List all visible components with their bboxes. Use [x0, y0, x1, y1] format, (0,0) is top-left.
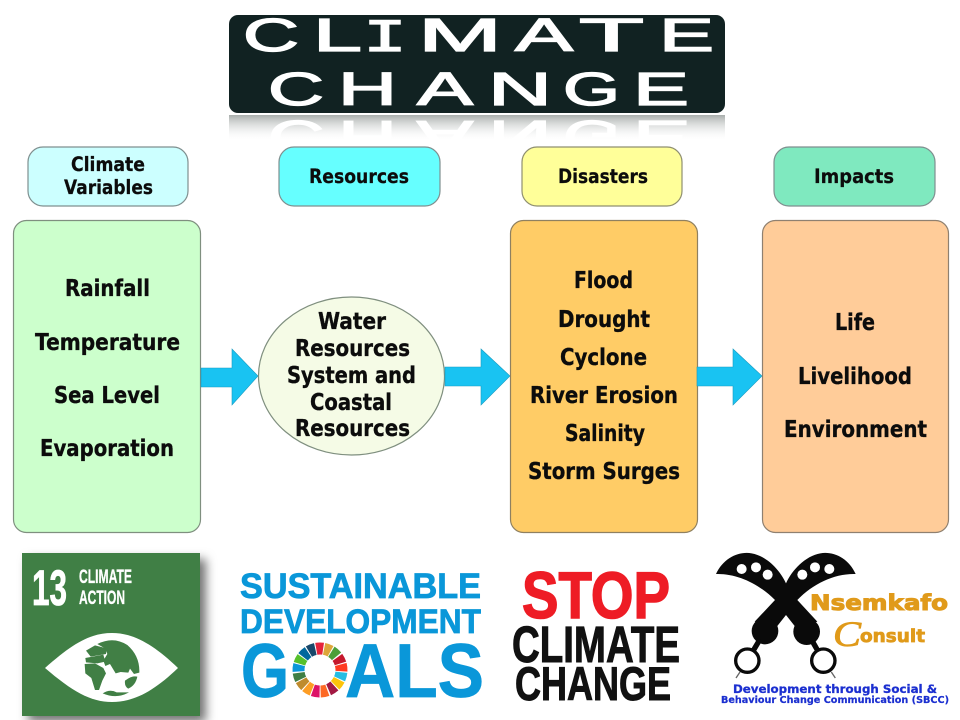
panel: resources ellipse: System and [287, 363, 416, 389]
panel: impacts: Livelihood [798, 364, 912, 390]
title reflection: C [268, 111, 324, 163]
logo: Nsemkafo Consult: onsult [860, 626, 925, 647]
title: CHANGE: G [563, 63, 620, 115]
title: CLIMATE: E [659, 9, 714, 61]
panel: disasters [510, 220, 698, 532]
panel: disasters: Cyclone [560, 345, 647, 371]
header: Impacts: Impacts [814, 165, 894, 188]
panel: disasters: River Erosion [530, 383, 678, 409]
panel: resources ellipse: Resources [295, 416, 410, 442]
panel: resources ellipse: Resources [295, 336, 410, 362]
logo: Stop Climate Change: CHANGE [515, 657, 671, 710]
arrow: resources to disasters [445, 349, 510, 405]
logo: Stop Climate Change: CLIMATE [512, 616, 680, 673]
logo: Nsemkafo Consult: Behaviour Change Communication (SBCC) [721, 695, 949, 706]
logo: Nsemkafo Consult: Nsemkafo [810, 591, 948, 615]
logo: SDG 13 climate action [22, 553, 200, 716]
title: CHANGE: E [633, 63, 689, 115]
title reflection: H [338, 111, 397, 163]
header: Disasters [522, 147, 682, 206]
logo: Sustainable Development Goals: ALS [345, 629, 484, 714]
logo: SDG 13 climate action: ACTION [79, 588, 125, 609]
icon: eye with globe [45, 633, 178, 702]
title reflection: E [633, 111, 689, 163]
title: CHANGE: C [268, 63, 324, 115]
title: CLIMATE: C [243, 9, 299, 61]
panel: climate variables [14, 220, 200, 532]
title: CLIMATE [243, 9, 714, 65]
header: Resources [279, 147, 440, 206]
logo: SDG 13 climate action: 13 [32, 560, 67, 616]
header: Impacts [774, 147, 935, 206]
arrow: disasters to impacts [697, 349, 762, 405]
title reflection: N [488, 111, 552, 163]
logo: Stop Climate Change [512, 558, 680, 710]
title: CHANGE [268, 63, 689, 115]
title banner [229, 9, 725, 115]
title: CLIMATE: M [418, 9, 502, 61]
logo: Nsemkafo Consult: Development through Social & [733, 682, 937, 696]
panel: disasters: Flood [574, 268, 633, 294]
panel: climate variables: Temperature [35, 330, 180, 356]
title: CLIMATE: T [579, 9, 644, 61]
logo: Nsemkafo Consult [716, 553, 949, 706]
panel: disasters: Drought [558, 307, 650, 333]
logo: Sustainable Development Goals [240, 567, 484, 714]
logo: SDG 13 climate action: CLIMATE [79, 567, 132, 588]
panel: disasters: Salinity [565, 421, 645, 447]
header: Resources: Resources [309, 165, 409, 188]
panel: resources ellipse [258, 297, 444, 455]
title: CHANGE: A [417, 63, 474, 115]
header: Disasters: Disasters [558, 165, 648, 188]
title reflection: G [563, 111, 620, 163]
panel: climate variables: Sea Level [54, 383, 160, 409]
logo: Sustainable Development Goals: DEVELOPMENT [240, 603, 481, 641]
icon: SDG colour wheel [290, 640, 350, 700]
panel: climate variables: Evaporation [40, 436, 174, 462]
icon: crossed swords [716, 553, 856, 678]
header: Climate Variables: Climate [71, 153, 145, 176]
logo: Stop Climate Change: STOP [522, 558, 670, 632]
panel: impacts: Life [835, 310, 875, 336]
panel: disasters: Storm Surges [528, 459, 680, 485]
logo: Nsemkafo Consult: C [833, 614, 862, 654]
title: CLIMATE: I [363, 13, 407, 65]
panel: impacts: Environment [784, 417, 927, 443]
panel: impacts [762, 220, 948, 532]
title: CLIMATE: A [515, 9, 574, 61]
title reflection: A [417, 111, 474, 163]
title: CLIMATE: L [313, 9, 362, 61]
title reflection [229, 115, 725, 134]
panel: resources ellipse: Coastal [310, 390, 392, 416]
logo: Sustainable Development Goals: G [241, 629, 289, 714]
arrow: variables to resources [201, 349, 258, 405]
header: Climate Variables: Variables [64, 176, 153, 199]
panel: resources ellipse: Water [318, 309, 387, 335]
logo: Sustainable Development Goals: SUSTAINABLE [240, 567, 481, 606]
panel: climate variables: Rainfall [65, 276, 150, 302]
title: CHANGE: N [488, 63, 552, 115]
title: CHANGE: H [338, 63, 397, 115]
header: Climate Variables [28, 147, 188, 206]
